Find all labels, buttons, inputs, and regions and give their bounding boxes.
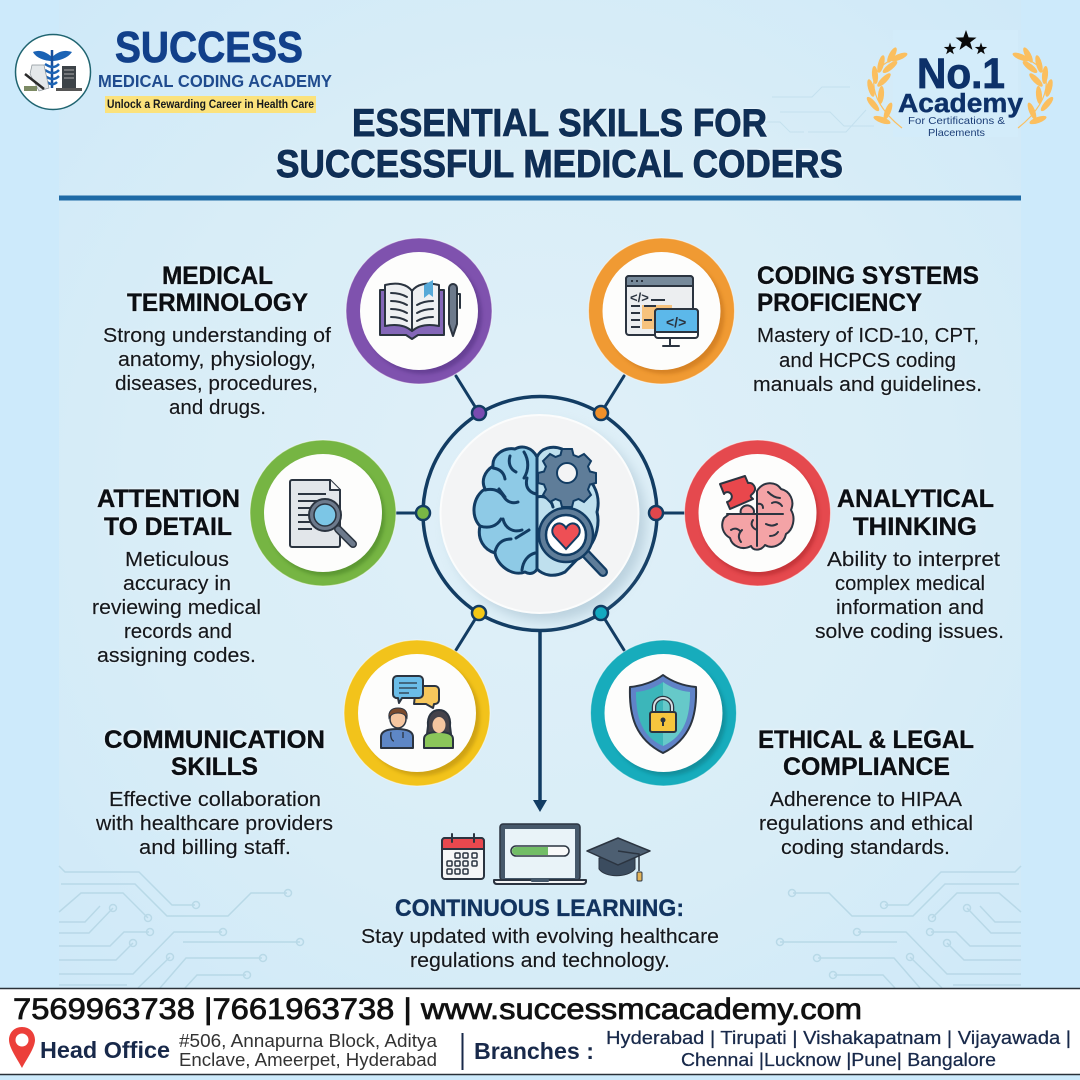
- panel: analytical thinking: [649, 440, 1004, 643]
- description: Strong understanding of: [103, 324, 331, 347]
- icon: code window and monitor: [626, 276, 698, 346]
- connector: [601, 376, 624, 413]
- description: Adherence to HIPAA: [770, 788, 962, 811]
- description: information and: [836, 596, 984, 619]
- branch list: [606, 1028, 1071, 1070]
- connector: [656, 512, 686, 514]
- arrow: [533, 631, 547, 812]
- panel: communication skills: [95, 606, 490, 859]
- description: Mastery of ICD-10, CPT,: [757, 324, 979, 347]
- description: regulations and technology.: [410, 949, 670, 972]
- description: Effective collaboration: [109, 788, 321, 811]
- icon: laurel right: [1012, 46, 1055, 128]
- icon: laurel left: [865, 46, 908, 128]
- node: [594, 406, 608, 420]
- description: and drugs.: [169, 396, 266, 419]
- purple ring: [346, 238, 492, 384]
- green ring: [250, 440, 396, 586]
- panel: ethical and legal compliance: [590, 606, 974, 859]
- address: #506, Annapurna Block, Aditya: [179, 1031, 438, 1051]
- address: [179, 1031, 438, 1070]
- connector: [456, 613, 479, 650]
- award badge: Academy: [898, 90, 1024, 118]
- heading: COMMUNICATION: [104, 726, 325, 754]
- heading: CONTINUOUS LEARNING:: [395, 895, 684, 922]
- heading: [837, 485, 994, 541]
- icon: document with magnifier: [290, 480, 353, 547]
- description: records and: [124, 620, 232, 643]
- icon: location pin: [9, 1027, 35, 1068]
- heading: SKILLS: [171, 753, 258, 781]
- branch list: Hyderabad | Tirupati | Vishakapatnam | Vijayawada |: [606, 1028, 1071, 1048]
- brand subtitle: MEDICAL CODING ACADEMY: [98, 71, 332, 91]
- heading: [757, 262, 979, 317]
- panel: attention to detail: [92, 440, 430, 667]
- heading: MEDICAL: [162, 262, 273, 290]
- heading: ATTENTION: [97, 485, 240, 513]
- branches label: Branches :: [474, 1038, 594, 1064]
- brand name: SUCCESS: [115, 23, 303, 72]
- logo emblem: [16, 34, 90, 110]
- heading: THINKING: [853, 513, 977, 541]
- heading: ETHICAL & LEGAL: [758, 726, 974, 754]
- icon: graduation cap: [587, 838, 650, 881]
- award badge: [865, 30, 1055, 139]
- description: [103, 324, 331, 419]
- teal ring: [590, 640, 736, 786]
- description: [759, 788, 973, 859]
- title: ESSENTIAL SKILLS FOR: [352, 102, 767, 145]
- icon: laptop with progress bar: [494, 824, 586, 884]
- title: SUCCESSFUL MEDICAL CODERS: [276, 143, 843, 186]
- node: [416, 506, 430, 520]
- icon: open book and pen: [380, 280, 460, 339]
- icon: calendar: [442, 834, 484, 879]
- description: [95, 788, 333, 859]
- icon: puzzle brain: [720, 476, 793, 550]
- description: regulations and ethical: [759, 812, 973, 835]
- heading: [127, 262, 308, 317]
- icon: brain with gear and magnifier: [474, 447, 603, 575]
- panel: coding systems proficiency: [588, 238, 982, 420]
- description: and billing staff.: [139, 836, 291, 859]
- description: [815, 548, 1004, 643]
- central hub: [423, 396, 657, 630]
- title: [276, 102, 843, 186]
- description: solve coding issues.: [815, 620, 1004, 643]
- red ring: [684, 440, 830, 586]
- description: Ability to interpret: [827, 548, 1000, 571]
- description: assigning codes.: [97, 644, 256, 667]
- connector: [456, 376, 479, 413]
- address: Enclave, Ameerpet, Hyderabad: [179, 1050, 437, 1070]
- icon: code window and monitor: </>: [666, 314, 686, 330]
- tagline badge: Unlock a Rewarding Career in Health Care: [107, 97, 314, 111]
- node: [594, 606, 608, 620]
- connector: [601, 613, 624, 650]
- icon: code window and monitor: </>: [630, 290, 649, 305]
- node: [649, 506, 663, 520]
- award badge: For Certifications &: [908, 115, 1005, 127]
- description: manuals and guidelines.: [753, 373, 982, 396]
- heading: COMPLIANCE: [783, 753, 950, 781]
- orange ring: [588, 238, 734, 384]
- description: complex medical: [835, 572, 985, 595]
- heading: CODING SYSTEMS: [757, 262, 979, 290]
- description: [92, 548, 261, 667]
- award badge: Placements: [928, 127, 985, 139]
- icon: two people talking: [381, 676, 453, 748]
- node: [472, 406, 486, 420]
- heading: [97, 485, 240, 541]
- panel: medical terminology: [103, 238, 492, 420]
- description: Meticulous: [125, 548, 229, 571]
- heading: TO DETAIL: [104, 513, 232, 541]
- icon: stars: [944, 30, 987, 54]
- yellow ring: [344, 640, 490, 786]
- description: Stay updated with evolving healthcare: [361, 925, 719, 948]
- panel: continuous learning: [361, 631, 719, 972]
- footer panel: [0, 988, 1080, 1074]
- branch list: Chennai |Lucknow |Pune| Bangalore: [681, 1050, 996, 1070]
- description: [753, 324, 982, 396]
- connector: [396, 512, 423, 514]
- heading: ANALYTICAL: [837, 485, 994, 513]
- gear: [538, 449, 596, 507]
- contact line: 7569963738 |7661963738 | www.successmcacademy.com: [13, 993, 862, 1026]
- heading: TERMINOLOGY: [127, 289, 308, 317]
- award badge: No.1: [917, 50, 1005, 98]
- description: accuracy in: [123, 572, 231, 595]
- heading: [758, 726, 974, 781]
- heading: [104, 726, 325, 781]
- heading: PROFICIENCY: [757, 289, 922, 317]
- description: and HCPCS coding: [779, 349, 956, 372]
- description: anatomy, physiology,: [118, 348, 316, 371]
- icon: shield and padlock: [630, 675, 696, 753]
- description: coding standards.: [781, 836, 950, 859]
- description: diseases, procedures,: [115, 372, 318, 395]
- head office label: Head Office: [40, 1037, 170, 1063]
- node: [472, 606, 486, 620]
- magnifier: [585, 553, 603, 572]
- description: [361, 925, 719, 972]
- description: reviewing medical: [92, 596, 261, 619]
- description: with healthcare providers: [95, 812, 333, 835]
